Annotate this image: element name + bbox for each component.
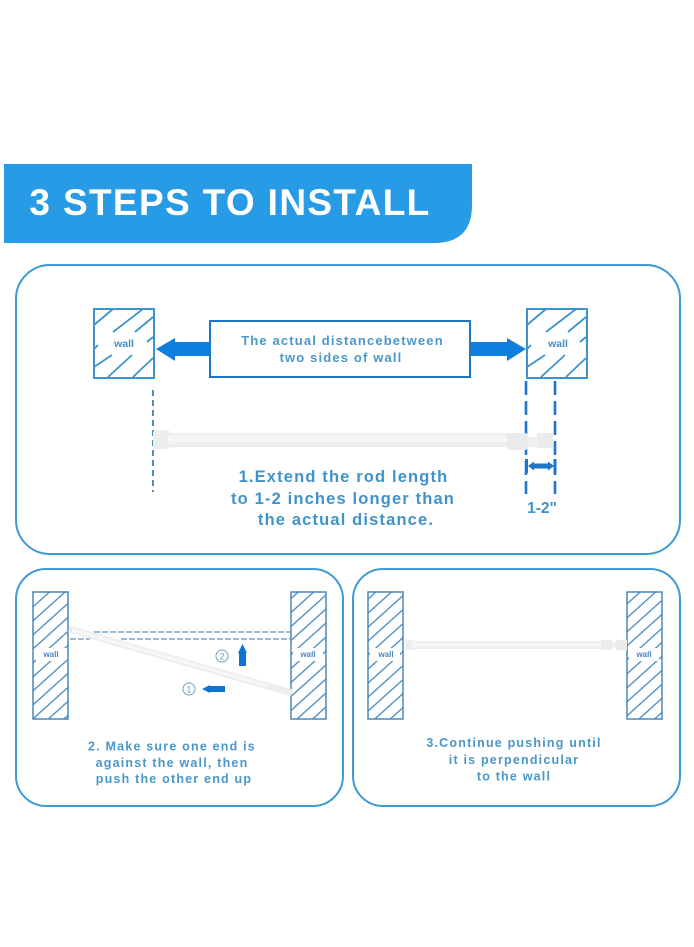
step 1 text bbox=[231, 468, 455, 529]
marker 1 bbox=[183, 683, 195, 695]
panel: step 3 bbox=[353, 569, 680, 806]
step 1 text: to 1-2 inches longer than bbox=[231, 490, 455, 508]
step 2 text: 2. Make sure one end is bbox=[88, 740, 256, 754]
horizontal rod bbox=[405, 640, 627, 650]
right wall: wall bbox=[635, 650, 652, 659]
distance label box: The actual distancebetween bbox=[241, 333, 444, 348]
left wall bbox=[33, 592, 68, 719]
dimension label: 1-2" bbox=[527, 500, 557, 517]
extended rod bbox=[153, 430, 553, 450]
step 3 text: 3.Continue pushing until bbox=[426, 736, 602, 750]
left arrow bbox=[156, 338, 211, 361]
panel: step 2 bbox=[16, 569, 343, 806]
marker 2: 2 bbox=[219, 652, 225, 662]
distance label box: two sides of wall bbox=[280, 350, 402, 365]
marker 1: 1 bbox=[186, 684, 192, 694]
title banner bbox=[4, 164, 472, 243]
step 1 text: 1.Extend the rod length bbox=[239, 468, 448, 486]
left wall bbox=[94, 309, 154, 378]
left wall: wall bbox=[377, 650, 394, 659]
left arrow bbox=[202, 685, 225, 693]
marker 2 bbox=[216, 650, 228, 662]
step 3 text: it is perpendicular bbox=[449, 753, 579, 767]
step 2 text bbox=[88, 740, 256, 786]
left wall: wall bbox=[113, 338, 134, 350]
step 2 text: against the wall, then bbox=[96, 756, 248, 770]
left dashed guide bbox=[152, 390, 154, 492]
step 1 text: the actual distance. bbox=[258, 511, 434, 529]
right wall: wall bbox=[547, 338, 568, 350]
step 2 text: push the other end up bbox=[96, 772, 252, 786]
left wall: wall bbox=[42, 650, 59, 659]
step 3 text bbox=[426, 736, 602, 784]
right arrow bbox=[470, 338, 526, 361]
step 3 text: to the wall bbox=[477, 770, 551, 784]
right wall bbox=[527, 309, 587, 378]
distance label box bbox=[210, 321, 470, 377]
right wall bbox=[627, 592, 662, 719]
left wall bbox=[368, 592, 403, 719]
right wall: wall bbox=[299, 650, 316, 659]
dashed target position lines bbox=[70, 632, 290, 639]
right wall bbox=[291, 592, 326, 719]
panel: step 1 bbox=[16, 265, 680, 554]
right dashed guides bbox=[526, 381, 555, 494]
tilted rod bbox=[69, 629, 292, 693]
up arrow bbox=[238, 644, 247, 666]
title: 3 STEPS TO INSTALL bbox=[29, 182, 431, 223]
1-2 inch dimension arrow bbox=[525, 459, 556, 473]
